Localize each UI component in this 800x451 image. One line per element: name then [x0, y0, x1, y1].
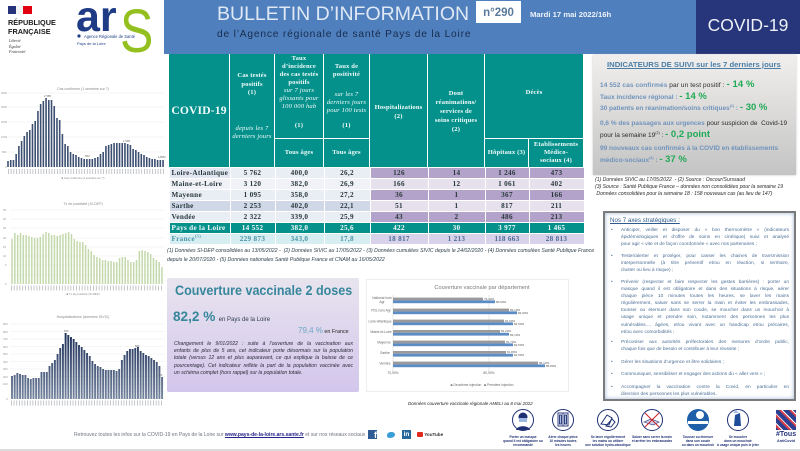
data table: 17,8: [340, 234, 354, 242]
data table: 3 120: [244, 180, 261, 188]
data table: 486: [501, 212, 513, 220]
chart: cas confirmés: 552: [85, 154, 90, 158]
data table: 1 465: [548, 224, 565, 232]
caption: moucher: dans un mouchoir: [724, 439, 752, 443]
vaccination source caption: Données couverture vaccinale régionale AMELI au 8 mai 2022: [408, 401, 533, 406]
logo: ARS Pays de la Loire: Agence Régionale de Santé: [84, 34, 136, 39]
axe 3: Prévenir (respecter et faire respecter les gestes barrières) : porter un: [621, 280, 789, 285]
chart: taux de positivité: 30: [3, 217, 7, 221]
header: réanimations: soins critiques: [435, 117, 477, 124]
data table: 2: [455, 212, 458, 220]
data table: 229 873: [240, 234, 265, 242]
header: taux d'incidence: d’incidence: [282, 63, 316, 70]
axe 6: Communiquer, sensibiliser et engager des actions du « aller vers » ;: [621, 372, 765, 377]
logo: République française: Fraternité: [9, 49, 25, 54]
header: hôpitaux: [485, 139, 528, 167]
icon: youtube: YouTube: [424, 432, 443, 437]
indicator: taux d'incidence: Taux incidence régional : - 14 %: [600, 91, 707, 102]
data table: 339,0: [291, 212, 308, 220]
data table: 382,0: [291, 224, 308, 232]
axe 1: Anticiper, veiller et disposer du « bon thermomètre » (indicateurs: [621, 228, 789, 233]
axe 2: [621, 253, 789, 274]
icon: facebook: [368, 430, 377, 439]
data table: 18 817: [388, 234, 410, 242]
chart: taux de positivité: 25: [3, 226, 7, 230]
icon: fenêtre: [558, 413, 568, 426]
header: cas testés positifs: [230, 54, 274, 167]
data table: 400,0: [291, 168, 308, 176]
caption: laver les mains: [585, 435, 631, 447]
chart: couverture vaccinale par département: 82,50%: [514, 322, 525, 326]
chart: hospitalisations: 900: [3, 322, 8, 326]
header: hôpitaux: Hôpitaux (3): [488, 149, 525, 156]
bulletin number: [476, 1, 521, 23]
chart: couverture vaccinale par département: 82,90%: [518, 311, 529, 315]
axe 1: épidémiologiques et d’offre de soins en cinétique) suivi et analysé: [621, 235, 789, 240]
axe 3: usage unique et prendre soin, notamment des personnes les plus: [621, 315, 789, 320]
data table: 26,2: [340, 168, 354, 176]
header: réanimations: services de: [440, 108, 472, 115]
national figure: 79,4 % en France: [298, 326, 349, 335]
indicator notes: (3) Source : Santé Publique France – données non consolidées pour la semaine 19: [595, 184, 783, 190]
axe 3: tousser ou éternuer dans son coude, se moucher dans un mouchoir à: [621, 308, 789, 313]
icon: linkedin: [402, 430, 411, 439]
caption: aérer: 10 minutes toutes: [549, 439, 577, 443]
header: réanimations: réanimations/: [436, 99, 476, 106]
data table: 30: [453, 224, 460, 232]
chart: hospitalisations: 600: [3, 345, 8, 349]
data table: Sarthe: [172, 202, 194, 210]
chart: cas confirmés: 1000: [1, 135, 8, 139]
footer link line: Retrouvez toutes les infos sur la COVID-19 en Pays de la Loire sur www.pays-de-la-loire.ars.sante.fr et sur nos réseaux sociaux: [74, 432, 365, 438]
chart: taux de positivité: 10: [3, 254, 7, 258]
data table: 382,0: [291, 180, 308, 188]
data table: 36: [395, 190, 403, 198]
axe 3: vulnérables..., âgées, et/ou vivant avec un handicap et/ou précaires,: [621, 323, 789, 328]
header: incidence tous âges: [275, 139, 323, 167]
logo: République française: [8, 6, 56, 54]
chart: cas confirmés: 2500: [1, 91, 8, 95]
chart: couverture vaccinale par département: 85,80%: [546, 364, 557, 368]
axe 3: [621, 279, 789, 336]
pictogrammes: gestes barrières: [512, 409, 749, 431]
caption: laver les mains: une solution hydro-alcoolique: [585, 443, 631, 447]
logo: République française: FRANÇAISE: [8, 27, 51, 36]
icon: poignée de main barrée: [644, 413, 659, 427]
chart: couverture vaccinale par département: 82,50%: [514, 353, 525, 357]
header: positivité tous âges: Tous âges: [332, 149, 361, 156]
header: établissements médico-sociaux: Médico-: [544, 149, 568, 156]
axe 7: direction des personnes les plus vulnérables.: [621, 392, 717, 397]
COVID-19 banner: [696, 0, 800, 54]
chart: couverture vaccinale par département: Vendée: [379, 362, 391, 366]
indicator: passages aux urgences: 0,6 % des passages aux urgences pour suspicion de Covid-19: [600, 120, 787, 127]
chart: cas confirmés: Cas confirmés (1 semaine sur 7): [57, 87, 109, 91]
data table: 5 762: [244, 168, 261, 176]
chart: couverture vaccinale par département: Loire-Atlantique: [368, 320, 392, 324]
chart: hospitalisations: 879: [64, 329, 69, 333]
header: cas testés positifs: Cas testés: [237, 72, 267, 79]
vaccination note: pourcentage). Cet indicateur reflète la part de la population vaccinée avec: [174, 363, 353, 369]
axe 4: [621, 339, 789, 353]
header: taux de positivité: (1): [342, 122, 351, 129]
indicator notes: Données consolidées pour la semaine 18 : 158 nouveaux cas (au lieu de 147): [596, 191, 772, 197]
header: décès: [485, 54, 583, 138]
légendes des pictogrammes: [503, 435, 759, 447]
chart: hospitalisations: 200: [3, 375, 8, 379]
icons: réseaux sociaux: [368, 430, 443, 439]
caption: laver les mains: les mains ou utiliser: [593, 439, 623, 443]
regional figure: 82,2 % en Pays de la Loire: [173, 309, 270, 324]
chart: hospitalisations: 700: [3, 337, 8, 341]
caption: moucher: Se moucher: [729, 435, 747, 439]
vaccination note: [174, 341, 354, 376]
chart: couverture vaccinale par département: 79,40%: [484, 297, 495, 301]
data table: 22,1: [340, 202, 354, 210]
table footnotes: [167, 248, 594, 263]
data table: 343,0: [291, 234, 308, 242]
caption: laver les mains: Se laver régulièrement: [591, 435, 625, 439]
table footnotes: (1) Données SI-DEP consolidées au 13/05/2022 - (2) Données SIVIC au 17/05/2022 - (3) Données cumulées SIVIC depuis le 24/02/2020 - (4) Données cumulées Santé Publique France: [167, 248, 594, 254]
caption: saluer: Saluer sans serrer la main: [632, 435, 672, 439]
data table: 211: [551, 202, 562, 210]
header: positivité tous âges: [324, 139, 369, 167]
header: taux d'incidence: Taux: [292, 55, 306, 62]
chart: hospitalisations: 400: [3, 360, 8, 364]
data table: Vendée: [172, 212, 195, 220]
axe 3: et/ou avec comorbidités ;: [621, 330, 674, 335]
caption: moucher: à usage unique puis le jeter: [717, 443, 759, 447]
data table: 367: [501, 190, 513, 198]
caption: masque: Porter un masque: [509, 435, 537, 439]
header: réanimations: (2): [452, 126, 460, 133]
data table: 26,9: [340, 180, 354, 188]
chart: couverture vaccinale par département: ■ Deuxième injection ■ Première injection: [451, 383, 514, 387]
title: BULLETIN D’INFORMATION: [217, 3, 469, 25]
chart: cas confirmés: 14552: [158, 155, 166, 159]
header: taux d'incidence: des cas testés: [280, 71, 318, 78]
header: hospitalisations: (2): [394, 113, 403, 120]
data table: 166: [393, 180, 405, 188]
chart: cas confirmés: 0: [5, 165, 7, 169]
logo: République française: RÉPUBLIQUE: [8, 18, 56, 27]
icon: linkedin: in: [404, 431, 409, 438]
data table: 402: [551, 180, 562, 188]
header: décès: Décès: [526, 89, 542, 96]
caption: tousser: [682, 435, 714, 447]
caption: tousser: Tousser ou éternuer: [683, 435, 713, 439]
header: taux d'incidence: sur 7 jours: [284, 87, 314, 94]
caption: aérer: les heures: [555, 443, 571, 447]
data table: 1: [455, 202, 458, 210]
icon: twitter: [387, 432, 395, 438]
data table: Maine-et-Loire: [172, 180, 222, 188]
chart: couverture vaccinale par département: 85,10%: [539, 361, 550, 365]
indicator: cas confirmés: 14 552 cas confirmés par un test positif : - 14 %: [600, 79, 754, 90]
indicator notes: (1) Données SIVIC au 17/05/2022 - (2) Source : Oscour/Surssaud: [595, 177, 745, 183]
caption: saluer: [632, 435, 672, 443]
icon: lavage des mains: [601, 415, 615, 427]
header: COVID-19: [169, 54, 229, 167]
vaccination note: un schéma complet (hors rappel) sur la population totale.: [174, 370, 303, 376]
caption: tousser: ou dans un mouchoir: [682, 443, 714, 447]
header: taux d'incidence: (1): [295, 122, 303, 129]
chart: hospitalisations: [3, 315, 165, 406]
header: hospitalisations: [370, 54, 427, 167]
axe 1: [621, 227, 789, 248]
chart: couverture vaccinale par département: Agr: [379, 300, 385, 304]
data table: Pays de la Loire: [172, 224, 225, 232]
caption: aérer: Aérer chaque pièce: [548, 435, 578, 439]
caption: masque: recommandé: [513, 443, 533, 447]
chart: cas confirmés: 2000: [1, 105, 8, 109]
data table: 3 977: [498, 224, 516, 232]
chart: taux de positivité: Tx de positivité (SI-DEP): [63, 202, 103, 206]
chart: couverture vaccinale par département: Mayenne: [377, 340, 391, 344]
chart: taux de positivité: 35: [3, 208, 7, 212]
chart: hospitalisations: 100: [3, 382, 8, 386]
chart: couverture vaccinale par département: 81,80%: [507, 350, 518, 354]
panel heading: INDICATEURS DE SUIVI sur les 7 derniers jours: [607, 60, 781, 69]
chart: cas confirmés: ■ Cas confirmés (1 semaine sur 7): [62, 176, 105, 180]
header: réanimations: Dont: [449, 90, 463, 97]
header: taux d'incidence: positifs: [288, 79, 310, 86]
data table: 25,9: [340, 212, 354, 220]
chart: couverture vaccinale par département: National hors: [372, 296, 392, 300]
data table: 402,0: [291, 202, 308, 210]
icon: masque: [516, 412, 530, 430]
indicator: semaine 19: pour la semaine 19(2) : - 0,2 point: [600, 129, 710, 140]
data table: 1 061: [498, 180, 516, 188]
header: cas testés positifs: depuis les 7: [236, 125, 268, 132]
vaccination heading: Couverture vaccinale 2 doses: [175, 283, 352, 299]
footer rule: [0, 449, 800, 451]
caption: masque: [503, 435, 543, 447]
indicator: réanimation: 30 patients en réanimation/soins critiques(1) : - 30 %: [600, 102, 767, 113]
logo: ARS Pays de la Loire: Pays de la Loire: [77, 41, 106, 46]
data table: 43: [395, 212, 403, 220]
chart: couverture vaccinale par département: 82,10%: [510, 308, 521, 312]
caption: aérer: [548, 435, 578, 447]
data table: 51: [395, 202, 403, 210]
chart: couverture vaccinale par département: Couverture vaccinale par département: [434, 285, 530, 291]
header: taux d'incidence: 100 000 hab: [282, 103, 316, 110]
data table: 2 322: [244, 212, 261, 220]
header: taux d'incidence: glissants pour: [279, 95, 319, 102]
data table: 1: [455, 190, 458, 198]
chart: couverture vaccinale par département: 80,00%: [483, 371, 495, 375]
header: réanimations: [428, 54, 484, 167]
chart: couverture vaccinale par département: 81,70%: [506, 340, 517, 344]
header: taux de positivité: Taux de: [335, 63, 358, 70]
logo: ARS Pays de la Loire: [76, 0, 153, 56]
date: Mardi 17 mai 2022/16h: [530, 10, 611, 19]
data table: 1 213: [448, 234, 465, 242]
data table: Loire-Atlantique: [172, 168, 228, 176]
data table: 817: [501, 202, 513, 210]
header: taux de positivité: sur les 7: [335, 91, 358, 98]
header: cas testés positifs: derniers jours: [232, 133, 272, 140]
panel: indicateurs de suivi: [593, 55, 796, 175]
badge: TousAntiCovid: #Tous: [776, 431, 796, 438]
vaccination note: Changement le 9/01/2022 : suite à l’ouverture de la vaccination aux: [174, 341, 353, 347]
data table: 358,0: [291, 190, 308, 198]
axe 3: masque quand il est obligatoire et dans des situations à risque, aérer: [621, 287, 789, 292]
data table: [170, 168, 584, 244]
chart: couverture vaccinale par département: 82,50%: [514, 343, 525, 347]
header: établissements médico-sociaux: Etablissements: [534, 141, 578, 148]
data table: 1 246: [498, 168, 516, 176]
indicator: établissements: 99 nouveaux cas confirmés à la COVID en établissements: [600, 145, 778, 152]
data table: 118 663: [494, 234, 520, 242]
header: taux de positivité: derniers jours: [327, 99, 366, 106]
chart: cas confirmés: 1 595: [123, 139, 130, 143]
chart: cas confirmés: 1500: [1, 120, 8, 124]
axe 5: Gérer les situations d’urgence et être solidaires ;: [621, 360, 724, 365]
chart: taux de positivité: 20: [3, 236, 7, 240]
vaccination note: enfants de plus de 5 ans, cet indicateur porte désormais sur la population: [174, 348, 353, 354]
chart: couverture vaccinale par département: Sarthe: [380, 351, 390, 355]
data table: 28 813: [546, 234, 567, 242]
header: taux de positivité: [324, 54, 369, 138]
caption: masque: quand il est obligatoire ou: [503, 439, 543, 443]
icon: tousser dans le coude: [687, 409, 709, 431]
data table: 126: [393, 168, 405, 176]
chart: hospitalisations: Hospitalisations (données SIVIC): [57, 315, 109, 319]
chart: cas confirmés: 2 585: [44, 94, 51, 98]
vaccination note: totale (versus 12 ans et plus auparavant, ce qui explique la baisse de ce: [174, 355, 353, 361]
data table: 25,6: [340, 224, 354, 232]
axe 3: chaque pièce 10 minutes toutes les heures, se laver les mains: [621, 294, 789, 299]
data table: 14: [453, 168, 460, 176]
logo: République française: Égalité: [9, 44, 21, 49]
header: COVID-19: COVID-19: [171, 104, 227, 117]
chart: taux de positivité: ■ Tx de positivité (SI-DEP): [66, 292, 100, 296]
axe 7: [621, 384, 789, 398]
chart: couverture vaccinale par département: PDL hors Agr: [371, 308, 392, 312]
chart: taux de positivité: 15: [3, 245, 7, 249]
chart: couverture vaccinale par département: Maine-et-Loire: [370, 330, 392, 334]
header: hospitalisations: Hospitalizations: [375, 104, 422, 111]
header: cas testés positifs: positifs: [241, 80, 263, 88]
data table: 2 253: [244, 202, 261, 210]
header: cas testés positifs: (1): [248, 89, 256, 96]
header: établissements médico-sociaux: [529, 139, 583, 167]
axes heading: Nos 7 axes stratégiques :: [610, 217, 680, 224]
chart: cas confirmés: [1, 87, 166, 180]
chart: couverture vaccinale par département: 81,60%: [505, 319, 516, 323]
chart: cas confirmés: 500: [2, 150, 7, 154]
chart: hospitalisations: 0: [6, 397, 8, 401]
header: établissements médico-sociaux: sociaux (4): [540, 157, 572, 164]
table footnotes: depuis le 20/07/2020 - (5) Données nationales Santé Publique France et CNAM au 16/05/2022: [167, 257, 385, 263]
chart: couverture vaccinale par département: 80,60%: [496, 300, 507, 304]
header: taux d'incidence: [275, 54, 323, 138]
header: taux de positivité: pour 100 tests: [327, 107, 366, 114]
icon: mouchoir: [733, 410, 741, 426]
caption: moucher: [717, 435, 759, 447]
logo: République française: Liberté: [9, 38, 21, 43]
header band: [164, 0, 696, 54]
bulletin number: n°290: [483, 7, 514, 19]
indicator notes: [595, 177, 783, 197]
panel: axes stratégiques: [603, 211, 796, 401]
axe 2: Tester/alerter et protéger, pour casser les chaines de transmission: [621, 254, 789, 259]
axe 4: chaque fois que de besoin et contribuer à leur réussite ;: [621, 347, 739, 352]
badge: TousAntiCovid: [776, 410, 796, 443]
header: incidence tous âges: Tous âges: [285, 149, 313, 156]
data table: 422: [393, 224, 405, 232]
chart: couverture vaccinale par département: [366, 279, 569, 392]
data table: 1 095: [244, 190, 261, 198]
chart: couverture vaccinale par département: 81,20%: [501, 329, 512, 333]
chart: taux de positivité: [3, 202, 165, 296]
chart: hospitalisations: 500: [3, 352, 8, 356]
chart: couverture vaccinale par département: 82,10%: [510, 333, 521, 337]
chart: hospitalisations: 300: [3, 367, 8, 371]
chart: taux de positivité: 0: [5, 282, 7, 286]
chart: hospitalisations: 680: [135, 344, 140, 348]
chart: couverture vaccinale par département: 70,00%: [387, 371, 399, 375]
axe 1: pour agir « vite et de façon coordonnée » avec nos partenaires ;: [621, 242, 757, 247]
indicator: médico-sociaux: médico-sociaux(3) : - 37 %: [600, 154, 687, 165]
data table: 166: [551, 190, 562, 198]
axe 2: interpersonnelle (à titre préventif et/ou en réaction, si territoire,: [621, 261, 789, 266]
chart: hospitalisations: 422: [158, 373, 163, 377]
header: taux de positivité: positivité: [333, 71, 360, 78]
chart: taux de positivité: 5: [5, 263, 7, 267]
chart: hospitalisations: 800: [3, 330, 8, 334]
data table: 14 552: [242, 224, 263, 232]
COVID-19 banner: COVID-19: [708, 15, 788, 35]
subtitle: de l’Agence régionale de santé Pays de la Loire: [217, 29, 471, 40]
data table: 473: [551, 168, 562, 176]
data table: 27,2: [340, 190, 354, 198]
axe 3: régulièrement, saluer sans se serrer la main et éviter les embrassades,: [621, 301, 789, 306]
axe 2: cluster ou lieu à risque) ;: [621, 268, 673, 273]
data table: 213: [551, 212, 562, 220]
table header: [169, 54, 583, 167]
caption: saluer: et arrêter les embrassades: [632, 439, 672, 443]
panel: couverture vaccinale: [167, 278, 359, 392]
badge: TousAntiCovid: AntiCovid: [777, 439, 795, 443]
data table: 12: [453, 180, 460, 188]
caption: tousser: dans son coude: [686, 439, 710, 443]
axe 7: Accompagner la vaccination contre la Covid, en particulier en: [621, 385, 789, 390]
data table: Mayenne: [172, 190, 202, 198]
axe 4: Préconiser aux autorités préfectorales des mesures d’ordre public,: [621, 340, 789, 345]
